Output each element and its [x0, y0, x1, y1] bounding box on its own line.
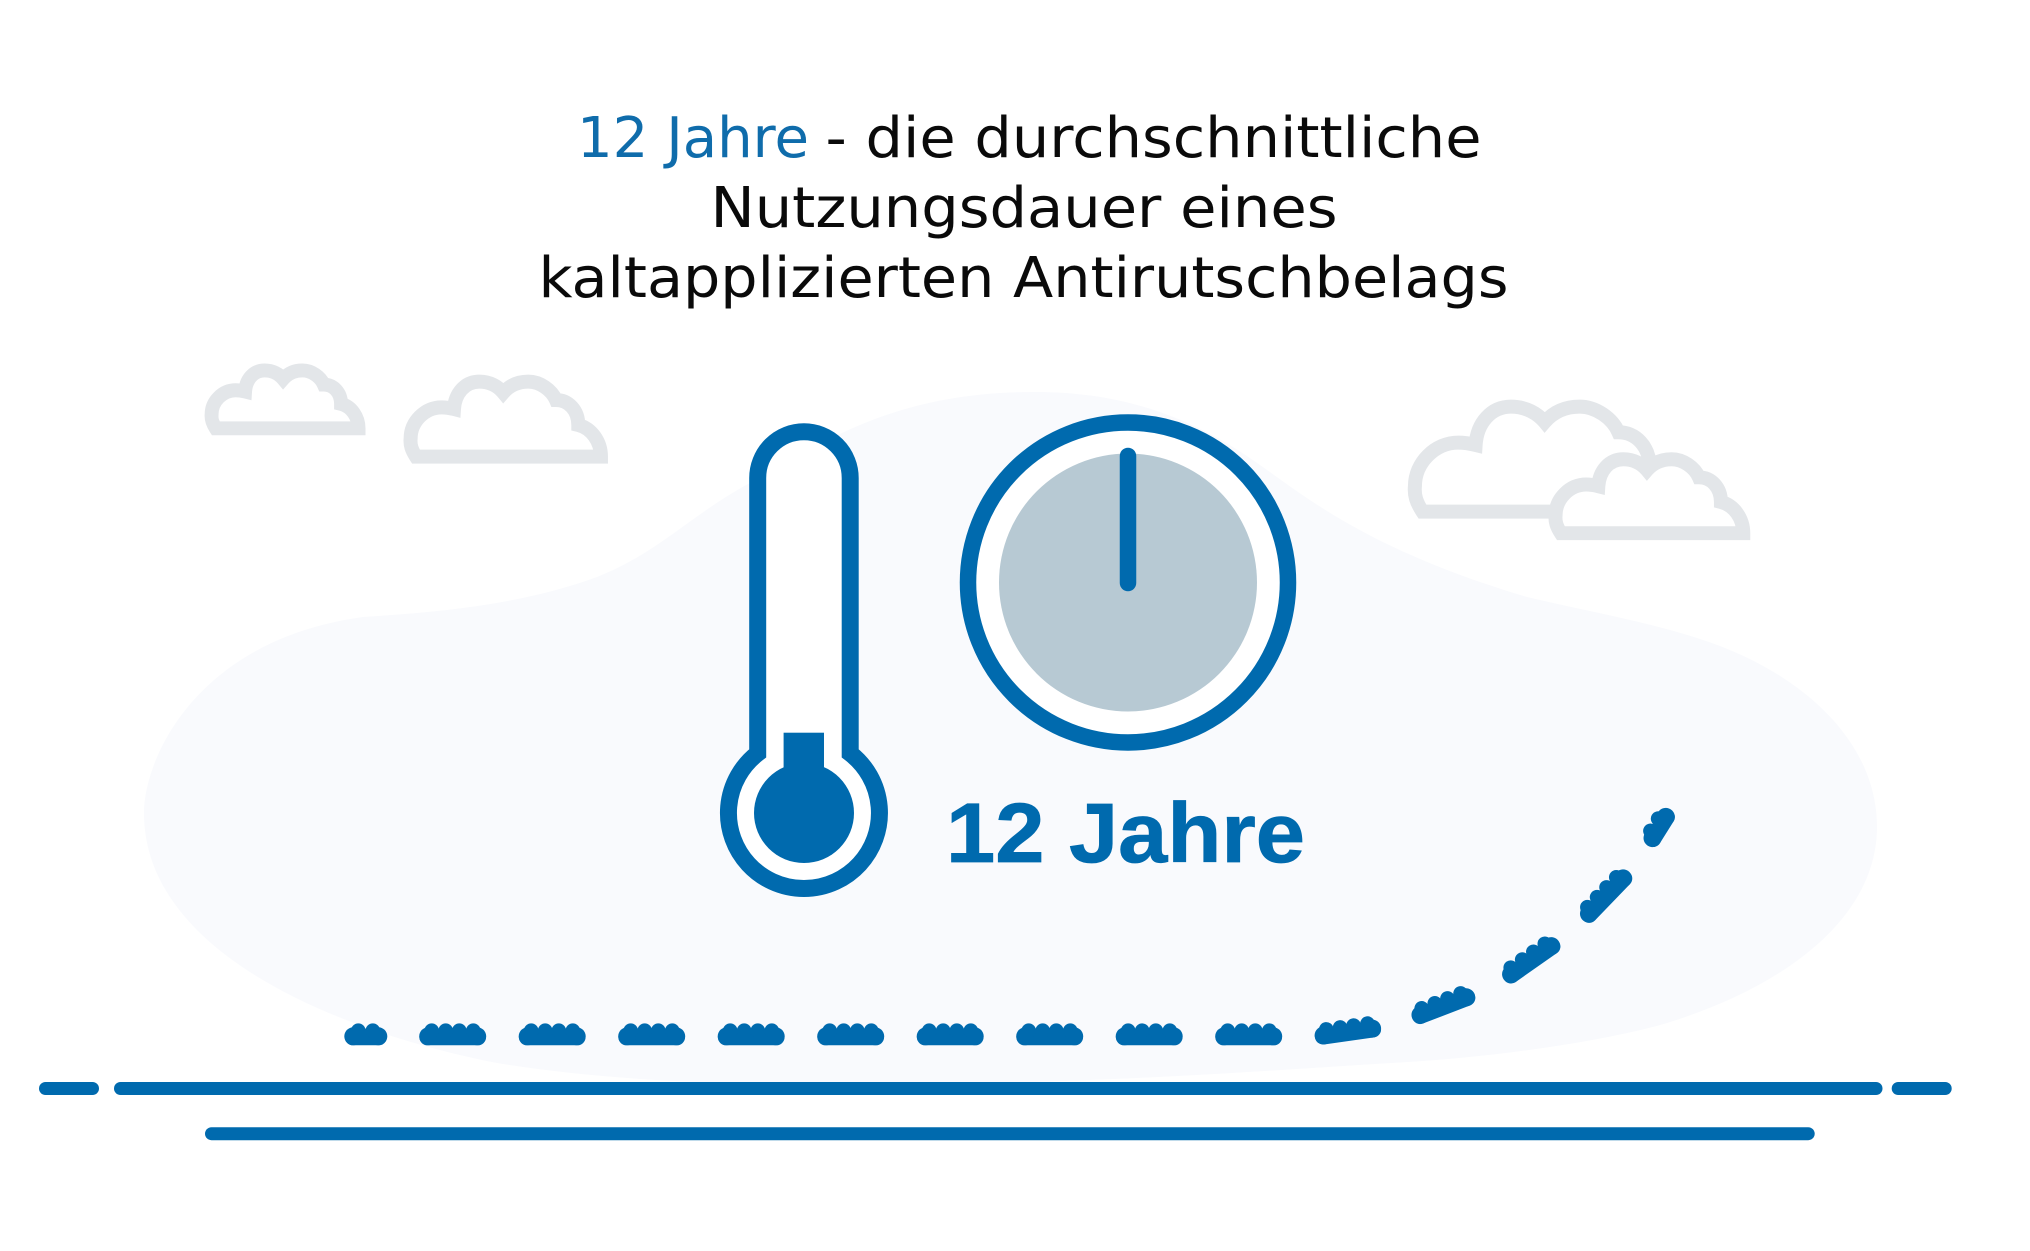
icon: cloud right large [1415, 407, 1681, 512]
title [538, 106, 1508, 311]
icon: cloud far left [212, 370, 359, 428]
icon: thermometer [728, 432, 879, 888]
anti-slip coating strip [344, 802, 1678, 1046]
background blob [144, 392, 1877, 1085]
title: 12 Jahre [577, 106, 809, 171]
title: - die durchschnittliche [826, 106, 1482, 171]
icon: clock [968, 422, 1288, 742]
title: kaltapplizierten Antirutschbelags [538, 246, 1508, 311]
icon: cloud left [411, 382, 601, 457]
title: Nutzungsdauer eines [710, 176, 1338, 241]
icon: cloud right small [1555, 459, 1743, 533]
big label: 12 Jahre: 12 Jahre [946, 786, 1305, 880]
road surface lines [39, 1082, 1952, 1140]
